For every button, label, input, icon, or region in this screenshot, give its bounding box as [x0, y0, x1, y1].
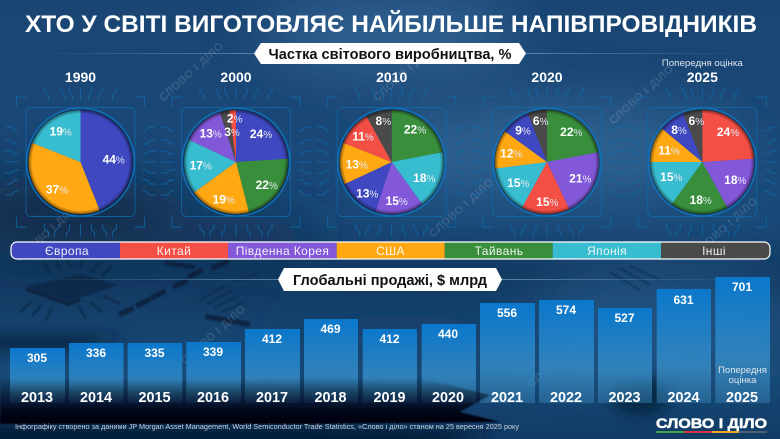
pie labels 2025: 18% — [690, 193, 712, 207]
watermarks: СЛОВО І ДІЛО: СЛОВО І ДІЛО — [691, 195, 760, 259]
bar year labels: 2022 — [550, 390, 582, 406]
bar chart: global sales — [10, 277, 770, 403]
pie labels 2025: 15% — [660, 170, 683, 184]
pie labels 2010 — [346, 114, 436, 208]
legend: Південна Корея — [236, 244, 329, 258]
bar 2014 — [69, 343, 124, 403]
pie labels 2025: 24% — [717, 125, 739, 139]
watermarks: СЛОВО І ДІЛО: СЛОВО І ДІЛО — [526, 326, 595, 390]
bar 2022: 574 — [556, 303, 576, 317]
legend: США — [376, 244, 405, 258]
bar 2025: Попередня — [718, 365, 767, 376]
pie labels 2010: 11% — [352, 130, 374, 144]
legend: Тайвань — [475, 244, 523, 258]
legend — [11, 242, 770, 259]
bar 2019: 412 — [379, 332, 400, 346]
watermarks: СЛОВО І ДІЛО: СЛОВО І ДІЛО — [14, 200, 83, 264]
pie labels 2000: 19% — [213, 192, 235, 206]
year label 1990: 1990 — [65, 69, 96, 85]
bar 2013: 305 — [27, 351, 47, 365]
bar year labels: 2014 — [80, 390, 112, 406]
bar 2024: 631 — [673, 293, 694, 307]
heading ribbon: global sales: Глобальні продажі, $ млрд — [293, 272, 487, 289]
bar 2013 — [10, 348, 65, 403]
legend: Китай — [157, 244, 191, 258]
bar 2014: 336 — [86, 346, 106, 360]
watermarks: СЛОВО І ДІЛО: СЛОВО І ДІЛО — [427, 176, 496, 240]
pie labels 1990: 37% — [46, 182, 68, 196]
year label 2010: 2010 — [376, 69, 407, 85]
bar 2016 — [186, 342, 241, 403]
panel: pie 2010 — [317, 69, 467, 237]
pie chart 2020 — [493, 108, 601, 216]
pie labels 2025 — [658, 114, 747, 207]
bar 2021: 556 — [497, 306, 517, 320]
dark band across bar bases — [0, 378, 500, 424]
bar year labels: 2020 — [432, 390, 464, 406]
pie labels 2000: 17% — [190, 158, 212, 172]
panel: pie 2025 — [627, 58, 777, 237]
pie labels 2000 — [190, 112, 278, 206]
year label 2020: 2020 — [531, 69, 563, 85]
pie labels 2000: 24% — [250, 127, 272, 141]
pie labels 2025: 11% — [658, 144, 680, 158]
year label 2000: 2000 — [220, 69, 252, 85]
bar 2024 — [657, 289, 711, 403]
bar 2016: 339 — [203, 345, 223, 359]
bar 2017 — [245, 329, 300, 403]
watermarks: СЛОВО І ДІЛО: СЛОВО І ДІЛО — [179, 303, 248, 367]
pie labels 2025: 6% — [689, 114, 704, 128]
watermarks: СЛОВО І ДІЛО — [14, 40, 760, 390]
panel: pie 2020 — [472, 69, 622, 237]
heading ribbon: production share: Частка світового виробництва, % — [268, 46, 512, 63]
legend: Інші — [702, 244, 726, 258]
pie labels 2025: 8% — [671, 123, 687, 137]
pie labels 2025: 18% — [724, 173, 747, 187]
watermarks: СЛОВО І ДІЛО: СЛОВО І ДІЛО — [371, 40, 440, 104]
panel: pie 1990 — [6, 69, 156, 237]
bar year labels: 2021 — [491, 390, 523, 406]
bar 2025: оцінка — [729, 375, 757, 386]
bar 2018: 469 — [320, 322, 341, 336]
bar 2023: 527 — [614, 311, 635, 325]
bar year labels: 2013 — [21, 390, 53, 406]
pie chart 1990 — [26, 108, 134, 216]
panel: pie 2000 — [161, 69, 311, 237]
pie labels 2010: 13% — [356, 186, 379, 200]
bar 2017: 412 — [262, 332, 282, 346]
logo: Слово і діло: СЛОВО І ДІЛО — [656, 415, 767, 431]
pie labels 2000: 13% — [200, 126, 222, 140]
pie labels 2000: 3% — [224, 125, 240, 139]
pie labels 2020: 6% — [533, 114, 549, 128]
bar 2020: 440 — [438, 327, 458, 341]
pie chart 2010 — [338, 108, 446, 216]
legend: Європа — [45, 244, 89, 258]
heading ribbon: global sales — [30, 268, 750, 291]
pie labels 2020: 15% — [536, 195, 559, 209]
bar 2025 — [715, 277, 770, 403]
year label 2025: 2025 — [687, 69, 718, 85]
preliminary estimate note: Попередня оцінка — [662, 58, 744, 69]
bar year labels: 2018 — [314, 390, 347, 406]
pie labels 2020: 9% — [515, 124, 531, 138]
pie labels 2020: 15% — [507, 176, 530, 190]
bar year labels: 2015 — [138, 390, 171, 406]
bar year labels: 2019 — [373, 390, 406, 406]
bar 2018 — [304, 319, 358, 403]
bar year labels: 2016 — [197, 390, 229, 406]
pie labels 2020 — [500, 114, 592, 209]
watermarks: СЛОВО І ДІЛО: СЛОВО І ДІЛО — [157, 40, 226, 104]
bar 2021 — [480, 303, 535, 403]
bar 2025: 701 — [732, 280, 752, 294]
pie chart 2000 — [182, 108, 290, 216]
pie labels 2010: 8% — [376, 114, 391, 128]
pie labels 2020: 22% — [560, 125, 583, 139]
pie labels 2000: 22% — [256, 178, 278, 192]
pie labels 2020: 21% — [569, 172, 592, 186]
watermarks: СЛОВО І ДІЛО: СЛОВО І ДІЛО — [607, 63, 676, 127]
bar 2015: 335 — [144, 346, 165, 360]
bar year labels: 2023 — [608, 390, 641, 406]
bar 2022 — [539, 300, 594, 403]
title: ХТО У СВІТІ ВИГОТОВЛЯЄ НАЙБІЛЬШЕ НАПІВПРОВІДНИКІВ — [25, 10, 757, 38]
pie labels 2010: 15% — [386, 194, 408, 208]
bar 2023 — [598, 308, 652, 403]
bar 2019 — [363, 329, 417, 403]
pie labels 1990 — [46, 124, 125, 196]
heading ribbon: production share — [30, 43, 750, 64]
pie labels 2010: 13% — [346, 158, 368, 172]
bar year labels: 2025 — [726, 390, 758, 406]
bar 2020 — [422, 324, 476, 403]
pie labels 1990: 19% — [50, 124, 72, 138]
pie chart 2025 — [648, 108, 756, 216]
pie labels 2010: 18% — [413, 171, 436, 185]
pie labels 2010: 22% — [404, 122, 426, 136]
pie labels 1990: 44% — [103, 152, 125, 166]
bar 2015 — [128, 343, 182, 403]
source note: Інфографіку створено за даними JP Morgan Asset Management, World Semiconductor Trade Statistics, «Слово і діло» станом на 25 вересня 2025 року — [15, 422, 519, 431]
legend: Японія — [587, 244, 627, 258]
bar year labels: 2024 — [667, 390, 700, 406]
pie labels 2000: 2% — [227, 112, 243, 126]
bar year labels — [21, 390, 758, 406]
pie labels 2020: 12% — [500, 146, 523, 160]
bar year labels: 2017 — [256, 390, 288, 406]
